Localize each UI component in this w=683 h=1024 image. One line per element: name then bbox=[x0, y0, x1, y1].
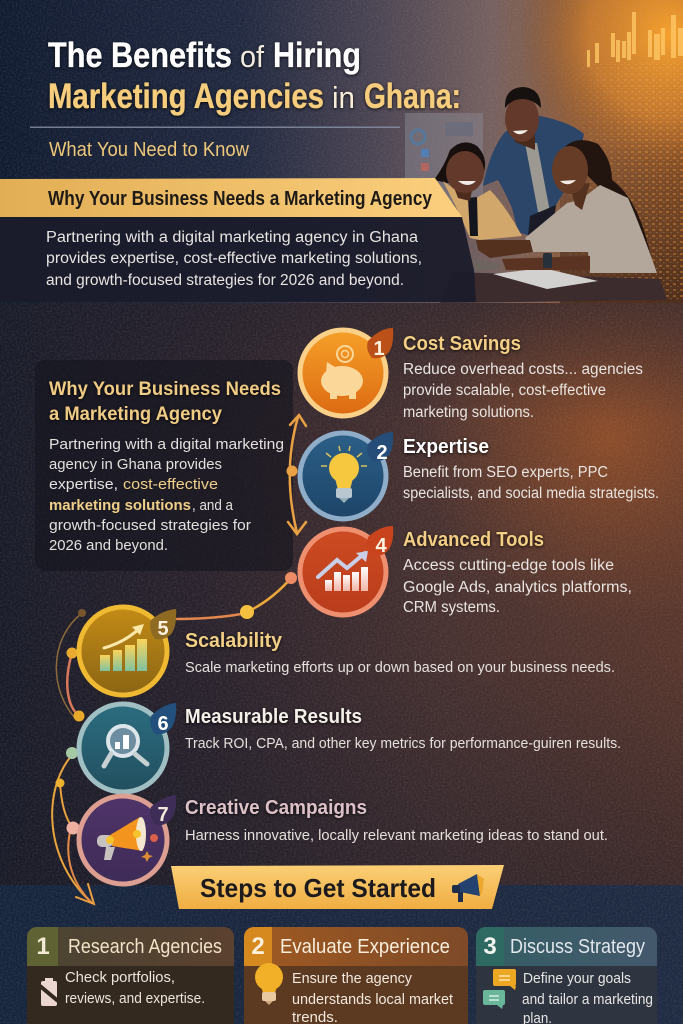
connector: scalability to measurable results bbox=[56, 609, 86, 722]
card 1: research agencies: Research Agencies bbox=[68, 936, 222, 958]
panel text: growth-focused strategies for bbox=[49, 517, 251, 534]
icon: megaphone bbox=[79, 796, 167, 884]
text: expertise: specialists, and social media strategists. bbox=[403, 485, 659, 502]
panel: why your business needs a marketing agency bbox=[35, 360, 293, 571]
woman in tan blazer bbox=[434, 142, 522, 240]
icon: piggy bank bbox=[300, 330, 386, 416]
arrow: measurable results to steps bbox=[52, 747, 94, 904]
heading: measurable results: Measurable Results bbox=[185, 706, 362, 728]
title bbox=[48, 36, 461, 116]
number badge 4 bbox=[367, 526, 393, 557]
heading: advanced tools: Advanced Tools bbox=[403, 529, 544, 551]
benefit 2: expertise bbox=[300, 432, 659, 519]
panel text: marketing solutions bbox=[49, 497, 191, 514]
icon: rising chart bbox=[300, 529, 386, 615]
card 3: discuss strategy bbox=[476, 927, 657, 1024]
number badge 6: 6 bbox=[157, 713, 169, 735]
icon: step light bulb bbox=[255, 963, 283, 1005]
title: Marketing Agencies bbox=[48, 77, 324, 116]
number badge 2 bbox=[367, 432, 393, 464]
card 1: research agencies: Check portfolios, bbox=[65, 970, 175, 986]
panel text bbox=[49, 436, 284, 554]
card 2: evaluate experience: understands local market bbox=[292, 992, 453, 1008]
title: of bbox=[240, 39, 264, 74]
panel text: Partnering with a digital marketing bbox=[49, 436, 284, 453]
panel text: expertise, bbox=[49, 476, 118, 493]
title: Ghana: bbox=[364, 77, 461, 116]
benefit 7: creative campaigns bbox=[79, 795, 608, 884]
title: The Benefits bbox=[48, 36, 232, 75]
steps banner: Steps to Get Started bbox=[200, 873, 436, 903]
card 3: discuss strategy: 3 bbox=[483, 933, 497, 960]
heading: scalability: Scalability bbox=[185, 630, 283, 652]
icon: light bulb bbox=[300, 433, 386, 519]
panel heading: Why Your Business Needs bbox=[49, 378, 281, 400]
text: cost savings: Reduce overhead costs... agencies bbox=[403, 361, 643, 378]
heading: creative campaigns: Creative Campaigns bbox=[185, 797, 367, 819]
benefit 1: cost savings bbox=[300, 328, 643, 421]
benefit 5: scalability bbox=[79, 607, 615, 695]
text: creative campaigns: Harness innovative, locally relevant marketing ideas to stand out. bbox=[185, 828, 608, 844]
number badge 6 bbox=[150, 703, 176, 735]
laptop bbox=[473, 259, 501, 272]
arrow: cost savings and expertise link bbox=[286, 415, 306, 534]
wall chart board bbox=[405, 113, 483, 203]
panel heading: a Marketing Agency bbox=[49, 403, 222, 425]
benefit 4: advanced tools bbox=[300, 526, 632, 616]
card 1: research agencies: 1 bbox=[36, 933, 50, 960]
intro text: provides expertise, cost-effective marketing solutions, bbox=[46, 250, 422, 267]
intro banner bbox=[0, 178, 462, 217]
city lights and glowing bars bbox=[575, 12, 683, 299]
woman in grey shirt bbox=[525, 140, 657, 273]
photo: three colleagues at a laptop bbox=[405, 87, 667, 303]
heading: cost savings: Cost Savings bbox=[403, 333, 521, 355]
text: advanced tools: Access cutting-edge tools like bbox=[403, 557, 614, 574]
clasped hands and forearms bbox=[476, 240, 590, 270]
text: cost savings bbox=[403, 361, 643, 421]
card 2: evaluate experience: 2 bbox=[251, 933, 265, 960]
icon: magnifying glass bbox=[79, 704, 167, 792]
card 2: evaluate experience bbox=[244, 927, 468, 1024]
card 3: discuss strategy: and tailor a marketing bbox=[522, 992, 653, 1008]
panel text: , and a bbox=[192, 497, 234, 514]
table with paper bbox=[440, 268, 667, 303]
text: advanced tools: CRM systems. bbox=[403, 599, 500, 616]
card 2: evaluate experience: Evaluate Experience bbox=[280, 936, 450, 958]
card 1: research agencies: reviews, and expertise. bbox=[65, 991, 205, 1007]
text: cost savings: marketing solutions. bbox=[403, 404, 534, 421]
card 3: discuss strategy: Discuss Strategy bbox=[510, 936, 645, 958]
number badge 7 bbox=[150, 795, 176, 826]
subtitle: What You Need to Know bbox=[49, 139, 250, 161]
panel heading bbox=[49, 378, 281, 425]
icon: chat bubbles bbox=[483, 969, 516, 1009]
title: Hiring bbox=[273, 36, 361, 75]
title: in bbox=[332, 80, 355, 115]
card 3: discuss strategy: Define your goals bbox=[523, 971, 631, 987]
icon: clipboard bbox=[41, 978, 57, 1006]
heading: expertise: Expertise bbox=[403, 436, 489, 458]
steps banner bbox=[171, 865, 504, 909]
title divider bbox=[30, 126, 400, 128]
text: cost savings: provide scalable, cost-effective bbox=[403, 382, 606, 399]
connector: advanced tools to scalability bbox=[177, 572, 297, 619]
number badge 7: 7 bbox=[157, 804, 169, 826]
panel text: cost-effective bbox=[123, 476, 218, 493]
number badge 2: 2 bbox=[376, 442, 388, 464]
intro panel bbox=[0, 178, 476, 302]
intro text: and growth-focused strategies for 2026 and beyond. bbox=[46, 272, 404, 289]
number badge 4: 4 bbox=[375, 535, 387, 557]
number badge 5 bbox=[150, 609, 176, 640]
number badge 5: 5 bbox=[157, 618, 169, 640]
man standing bbox=[483, 87, 584, 236]
benefit 6: measurable results bbox=[79, 703, 621, 792]
intro text bbox=[46, 229, 422, 289]
panel text: 2026 and beyond. bbox=[49, 537, 168, 554]
text: expertise: Benefit from SEO experts, PPC bbox=[403, 464, 608, 481]
panel text: agency in Ghana provides bbox=[49, 456, 222, 473]
intro banner: Why Your Business Needs a Marketing Agency bbox=[48, 188, 433, 210]
intro text: Partnering with a digital marketing agency in Ghana bbox=[46, 229, 418, 246]
step cards bbox=[27, 927, 657, 1024]
icon: small megaphone bbox=[452, 874, 484, 902]
card 1: research agencies bbox=[27, 927, 234, 1024]
number badge 1 bbox=[367, 328, 393, 360]
number badge 1: 1 bbox=[373, 338, 385, 360]
icon: growth bars bbox=[79, 607, 167, 695]
text: advanced tools: Google Ads, analytics platforms, bbox=[403, 579, 632, 596]
card 2: evaluate experience: Ensure the agency bbox=[292, 971, 413, 987]
text: measurable results: Track ROI, CPA, and other key metrics for performance-guiren results. bbox=[185, 736, 621, 752]
text: expertise bbox=[403, 464, 659, 502]
text: scalability: Scale marketing efforts up or down based on your business needs. bbox=[185, 660, 615, 676]
text: advanced tools bbox=[403, 557, 632, 616]
